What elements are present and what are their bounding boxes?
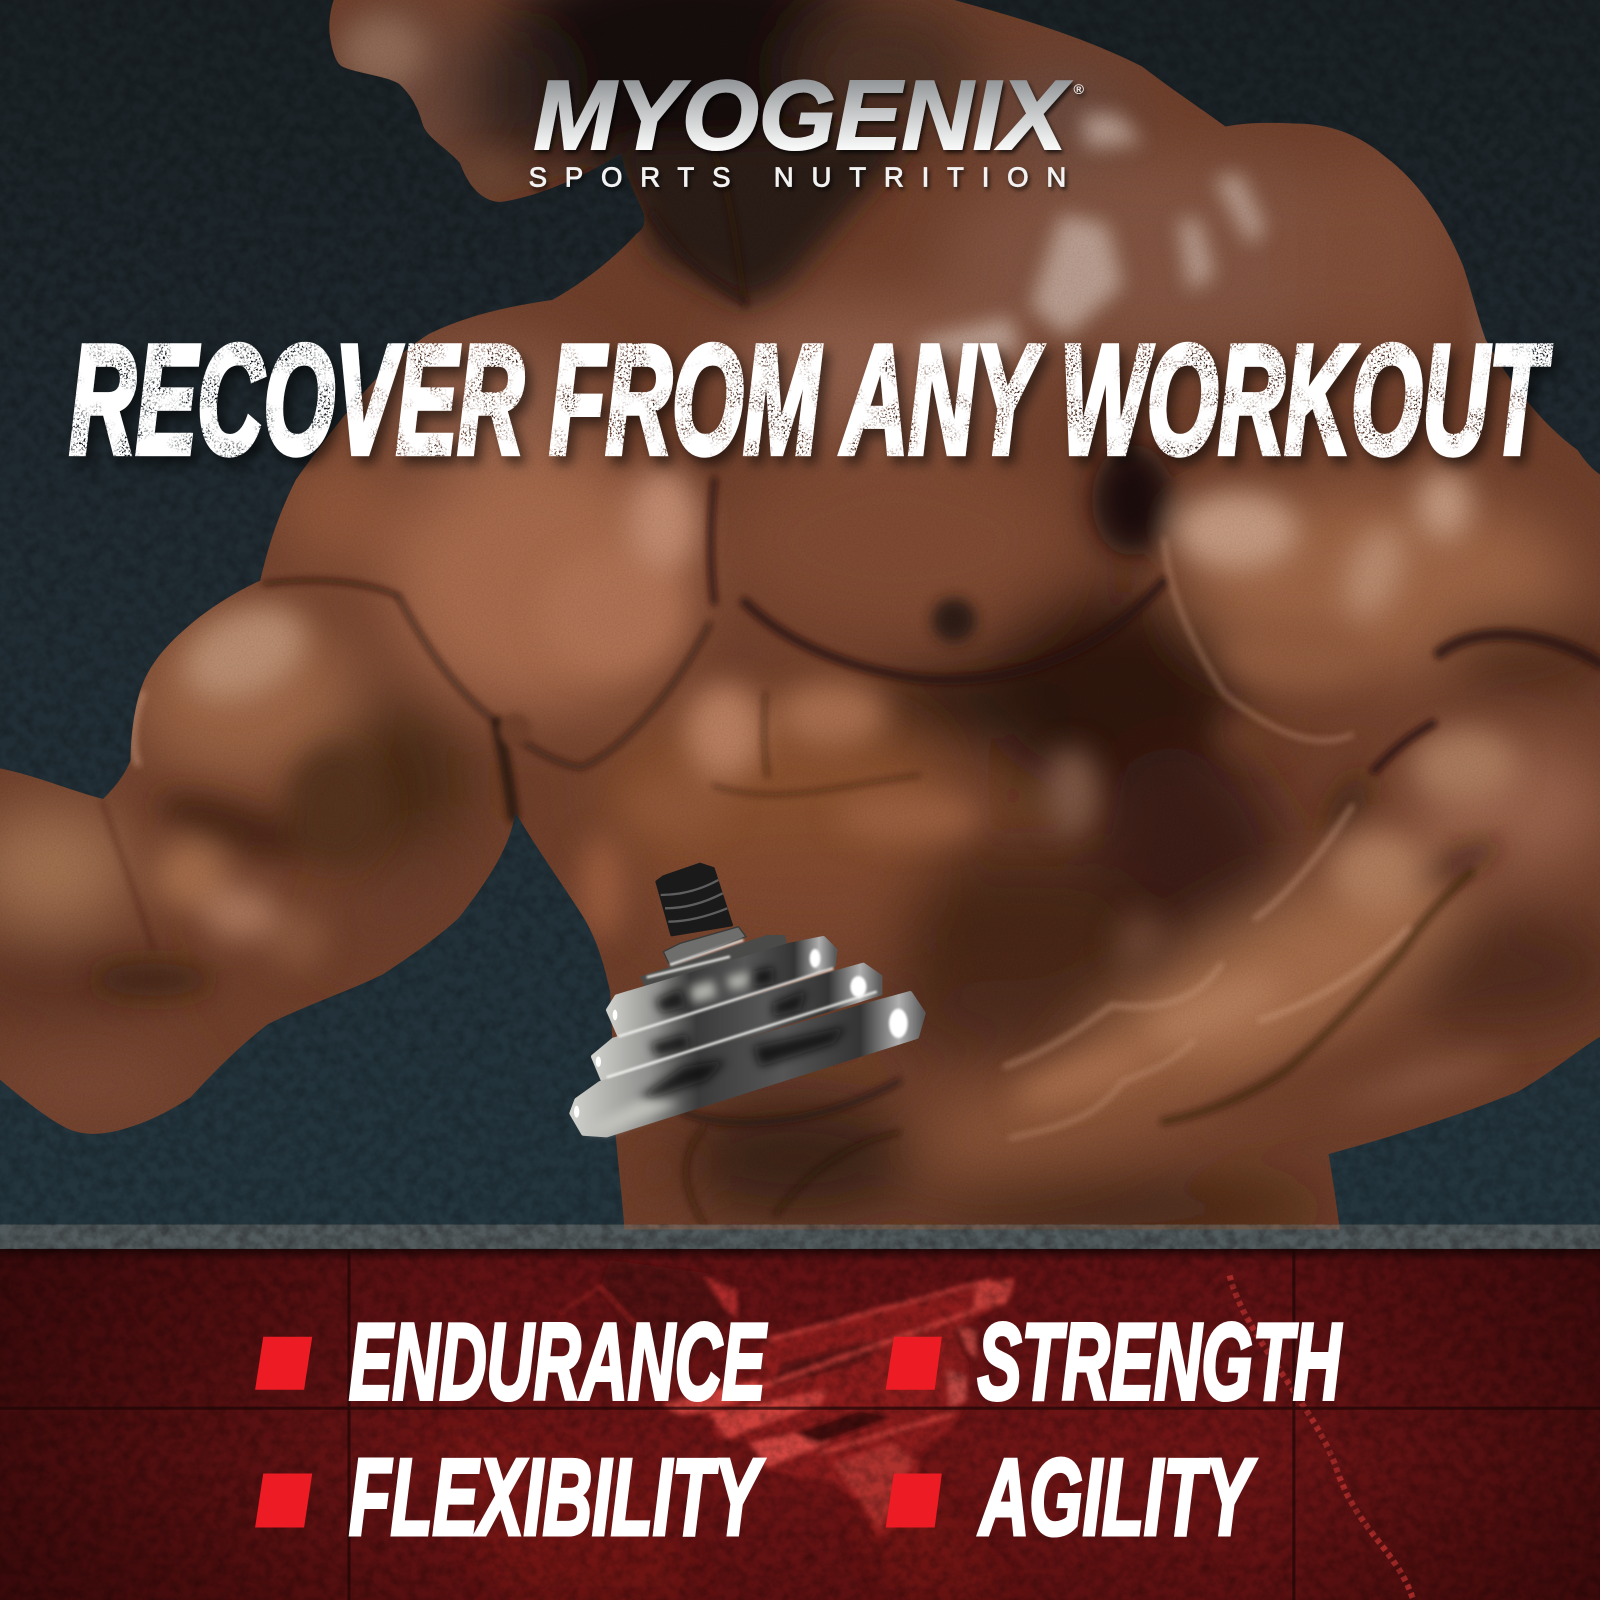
dumbbell bbox=[572, 864, 923, 1135]
benefit: flexibility bbox=[255, 1437, 765, 1558]
logo wordmark: MYOGENIX bbox=[534, 60, 1072, 170]
benefit: agility: AGILITY bbox=[978, 1437, 1257, 1558]
washer bbox=[663, 927, 746, 966]
benefit: endurance: ENDURANCE bbox=[349, 1301, 767, 1422]
shoulder highlights bbox=[918, 114, 1500, 367]
logo tagline: SPORTS NUTRITION bbox=[529, 162, 1066, 193]
benefit: flexibility: FLEXIBILITY bbox=[349, 1437, 765, 1558]
grey translucent band bbox=[0, 1224, 1600, 1249]
photo: muscular torso and arms bbox=[0, 0, 1600, 1265]
ghosted hand and dumbbell bbox=[439, 1260, 1413, 1600]
plate stack bbox=[572, 935, 923, 1135]
neck shadow bbox=[612, 133, 918, 306]
logo: Myogenix Sports Nutrition bbox=[529, 60, 1084, 193]
benefit: endurance bbox=[255, 1301, 767, 1422]
panel: red benefits section bbox=[0, 1249, 1600, 1600]
nipple: right pec bbox=[932, 598, 977, 643]
benefit: agility bbox=[886, 1437, 1257, 1558]
threaded bar bbox=[657, 864, 732, 935]
benefit: strength bbox=[886, 1301, 1342, 1422]
nipple: left pec bbox=[499, 713, 532, 746]
benefit: strength: STRENGTH bbox=[978, 1301, 1342, 1422]
registered mark: ® bbox=[1073, 82, 1084, 98]
